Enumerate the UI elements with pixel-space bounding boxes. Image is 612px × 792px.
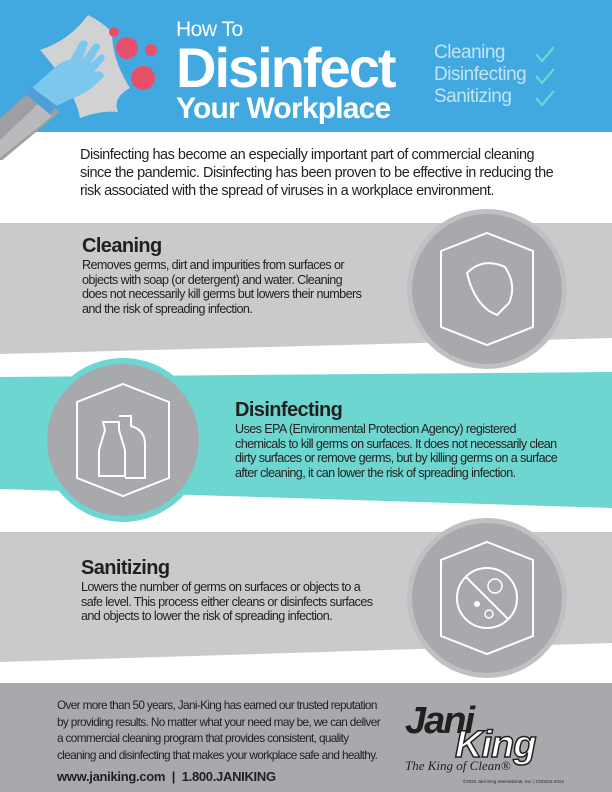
panel: sanitizing: Sanitizing	[81, 557, 169, 579]
logo: Jani-King: The King of Clean®	[405, 758, 511, 773]
title: Disinfect	[176, 36, 394, 99]
footer text: Over more than 50 years, Jani-King has earned our trusted reputation by providing results. No matter what your need may be, we can deliver a commercial cleaning program that provides consistent, quality cleaning and disinfecting that makes your workplace safe and healthy.	[57, 698, 380, 762]
logo: Jani-King: ©2022 Jani-King International, Inc. | CD0222-0314	[463, 779, 564, 784]
panel: cleaning: Cleaning	[82, 235, 162, 257]
logo: Jani-King	[405, 700, 564, 784]
logo: Jani-King: King	[455, 724, 535, 766]
checklist: Sanitizing	[434, 86, 511, 107]
icon: checks	[535, 46, 555, 106]
panel: disinfecting: Disinfecting	[235, 399, 342, 421]
checklist	[434, 42, 555, 107]
checklist: Cleaning	[434, 42, 505, 63]
icon: cleaning hexagon	[407, 209, 567, 369]
icon: disinfecting hexagon	[47, 358, 199, 522]
icon: sanitizing hexagon	[407, 518, 567, 678]
panel: sanitizing	[81, 557, 373, 623]
title: How To	[176, 18, 243, 41]
logo: Jani-King: Jani	[405, 700, 473, 742]
title	[176, 18, 396, 125]
panel: disinfecting: Uses EPA (Environmental Protection Agency) registered chemicals to kill germs on surfaces. It does not necessarily clean dirty surfaces or remove germs, but by killing germs on a surface after cleaning, it can lower the risk of spreading infection.	[235, 422, 557, 480]
panel: cleaning: Removes germs, dirt and impurities from surfaces or objects with soap (or detergent) and water. Cleaning does not necessarily kill germs but lowers their numbers and the risk of spreading infection.	[82, 258, 361, 316]
illustration: gloved hand wiping germs	[0, 15, 157, 160]
checklist: Disinfecting	[434, 64, 526, 85]
intro text: Disinfecting has become an especially important part of commercial cleaning since the pandemic. Disinfecting has been proven to be effective in reducing the risk associated with the spread of viruses in a workplace environment.	[80, 147, 553, 199]
panel: sanitizing: Lowers the number of germs on surfaces or objects to a safe level. This process either cleans or disinfects surfaces and objects to lower the risk of spreading infection.	[81, 580, 372, 623]
title: Your Workplace	[176, 92, 390, 125]
footer text: www.janiking.com | 1.800.JANIKING	[57, 769, 276, 784]
